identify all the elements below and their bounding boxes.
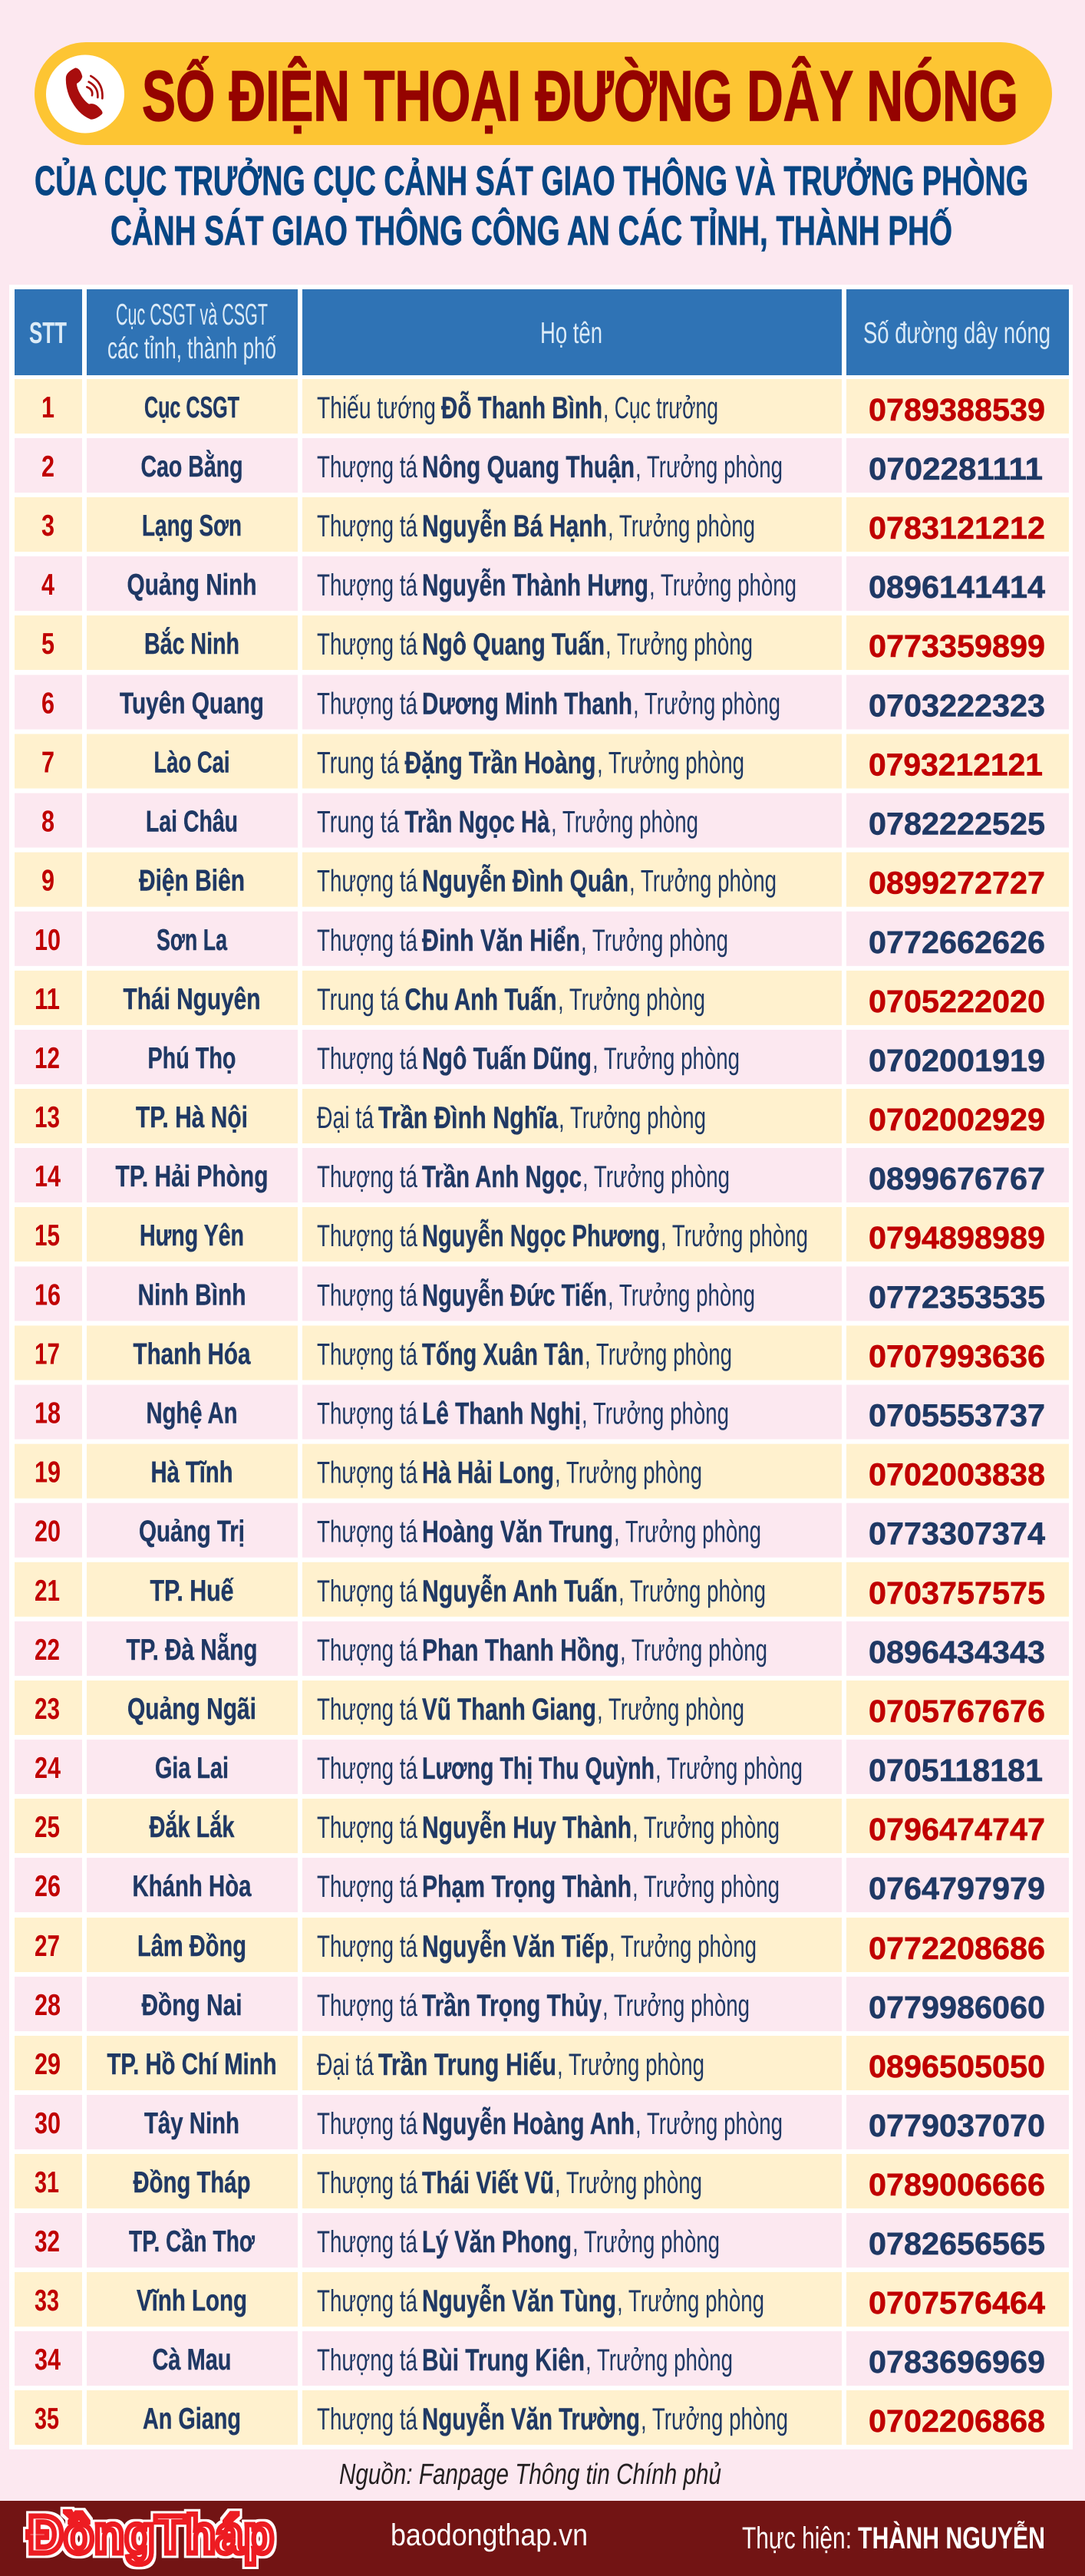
officer: Nguyễn Bá Hạnh	[422, 509, 607, 543]
officer: , Trưởng phòng	[641, 2403, 788, 2436]
footer	[0, 2501, 1085, 2576]
officer: Nguyễn Anh Tuấn	[422, 1574, 618, 1608]
phone: 0789006666	[869, 2167, 1045, 2202]
row 26	[15, 1858, 1069, 1912]
phone: 0702002929	[869, 1102, 1045, 1137]
officer: Thượng tá	[317, 1811, 418, 1845]
unit: Đồng Tháp	[134, 2166, 250, 2199]
row 1	[15, 379, 1069, 434]
number: 32	[35, 2225, 60, 2258]
subtitle	[35, 157, 1028, 254]
officer: , Trưởng phòng	[551, 806, 698, 839]
number: 3	[41, 510, 54, 543]
officer: Thượng tá	[317, 510, 418, 543]
number: 5	[41, 628, 54, 661]
officer: Ngô Quang Tuấn	[422, 628, 605, 661]
phone: 0703757575	[869, 1575, 1045, 1611]
phone: 0896505050	[869, 2049, 1045, 2084]
source note: Nguồn: Fanpage Thông tin Chính phủ	[339, 2459, 721, 2491]
officer: , Trưởng phòng	[597, 746, 744, 780]
unit: Thanh Hóa	[134, 1338, 251, 1370]
phone: 0783696969	[869, 2344, 1045, 2380]
officer: Trần Anh Ngọc	[422, 1160, 582, 1194]
officer: Thượng tá	[317, 450, 418, 484]
officer: , Trưởng phòng	[582, 1397, 729, 1431]
officer: Lý Văn Phong	[422, 2225, 572, 2259]
officer: Thượng tá	[317, 924, 418, 958]
row 7	[15, 734, 1069, 789]
phone: 0703222323	[869, 688, 1045, 723]
officer: Nguyễn Đức Tiến	[422, 1278, 607, 1312]
officer: Nguyễn Văn Trường	[422, 2402, 640, 2436]
unit: TP. Đà Nẵng	[126, 1633, 258, 1667]
unit: TP. Hà Nội	[136, 1101, 248, 1134]
phone: 0789388539	[869, 392, 1045, 427]
number: 7	[41, 746, 54, 780]
number: 25	[35, 1811, 60, 1844]
unit: Nghệ An	[146, 1397, 238, 1430]
row 23	[15, 1681, 1069, 1735]
officer: Nguyễn Văn Tiếp	[422, 1929, 608, 1964]
officer: Thượng tá	[317, 1930, 418, 1964]
number: 9	[41, 865, 54, 898]
row 4	[15, 556, 1069, 611]
officer: Thượng tá	[317, 1989, 418, 2023]
phone: 0899272727	[869, 866, 1045, 901]
number: 27	[35, 1930, 60, 1963]
officer: Thượng tá	[317, 1575, 418, 1608]
officer: , Trưởng phòng	[572, 2225, 720, 2259]
row 18	[15, 1385, 1069, 1440]
officer: , Trưởng phòng	[614, 1516, 761, 1549]
phone: 0794898989	[869, 1220, 1045, 1255]
officer: Trần Trọng Thủy	[422, 1989, 602, 2023]
officer: Đỗ Thanh Bình	[441, 391, 602, 425]
number: 23	[35, 1693, 60, 1726]
number: 2	[41, 450, 54, 483]
officer: , Trưởng phòng	[632, 1811, 780, 1845]
row 27	[15, 1918, 1069, 1972]
row 29	[15, 2036, 1069, 2090]
officer: Lê Thanh Nghị	[422, 1397, 581, 1431]
officer: Trung tá	[317, 746, 400, 780]
officer: Nguyễn Đình Quân	[422, 864, 628, 899]
header: STT: STT	[29, 317, 67, 350]
row 24	[15, 1740, 1069, 1794]
phone: 0705767676	[869, 1694, 1045, 1729]
unit: Đắk Lắk	[149, 1810, 235, 1844]
officer: Thiếu tướng	[317, 391, 436, 425]
phone: 0796474747	[869, 1812, 1045, 1847]
row 10	[15, 912, 1069, 966]
unit: Cà Mau	[152, 2343, 232, 2376]
unit: Ninh Bình	[138, 1278, 246, 1311]
number: 29	[35, 2048, 61, 2081]
officer: Thượng tá	[317, 2343, 418, 2377]
officer: Thượng tá	[317, 569, 418, 602]
officer: Đặng Trần Hoàng	[405, 746, 595, 780]
unit: Cục CSGT	[144, 391, 239, 424]
number: 17	[35, 1338, 60, 1370]
row 16	[15, 1266, 1069, 1321]
officer: Thượng tá	[317, 865, 418, 899]
number: 12	[35, 1042, 60, 1075]
phone: 0896141414	[869, 569, 1045, 605]
officer: Trung tá	[317, 806, 400, 839]
phone: 0896434343	[869, 1634, 1045, 1670]
unit: An Giang	[143, 2403, 241, 2436]
phone: 0773359899	[869, 628, 1045, 664]
unit: Gia Lai	[155, 1752, 229, 1785]
officer: , Trưởng phòng	[555, 2166, 702, 2200]
officer: , Trưởng phòng	[557, 2048, 704, 2082]
phone: 0764797979	[869, 1871, 1045, 1906]
row 13	[15, 1089, 1069, 1143]
officer: , Trưởng phòng	[632, 1870, 780, 1904]
officer: Dương Minh Thanh	[422, 688, 632, 721]
number: 13	[35, 1101, 60, 1134]
phone: 0782222525	[869, 806, 1045, 842]
header: unit	[107, 298, 276, 365]
officer: Trung tá	[317, 983, 400, 1017]
unit: Phú Thọ	[147, 1042, 236, 1075]
officer: Thượng tá	[317, 1752, 418, 1786]
officer: , Trưởng phòng	[629, 865, 777, 899]
officer: , Trưởng phòng	[617, 2284, 764, 2318]
title banner	[35, 42, 1052, 145]
officer: Thượng tá	[317, 1516, 418, 1549]
row 33	[15, 2272, 1069, 2327]
number: 19	[35, 1456, 61, 1489]
officer: Phạm Trọng Thành	[422, 1870, 632, 1904]
officer: Nguyễn Ngọc Phương	[422, 1219, 660, 1253]
phone: 0899676767	[869, 1161, 1045, 1196]
officer: Hoàng Văn Trung	[422, 1516, 613, 1549]
unit: Quảng Ninh	[127, 569, 256, 602]
officer: , Trưởng phòng	[655, 1752, 803, 1786]
officer: , Trưởng phòng	[602, 1989, 750, 2023]
row 25	[15, 1799, 1069, 1853]
officer: Thái Viết Vũ	[422, 2166, 554, 2200]
phone: 0705553737	[869, 1398, 1045, 1433]
website: baodongthap.vn	[391, 2518, 588, 2552]
phone: 0707576464	[869, 2285, 1045, 2320]
officer: Thượng tá	[317, 2107, 418, 2141]
officer: Nông Quang Thuận	[422, 450, 635, 484]
row 5	[15, 615, 1069, 670]
row 21	[15, 1562, 1069, 1617]
officer: , Trưởng phòng	[605, 628, 753, 661]
number: 31	[35, 2166, 59, 2199]
officer: , Trưởng phòng	[633, 688, 780, 721]
icon: phone	[46, 55, 124, 134]
officer: Tống Xuân Tân	[422, 1338, 584, 1372]
number: 8	[41, 806, 54, 839]
row 34	[15, 2331, 1069, 2386]
officer: Thượng tá	[317, 1693, 418, 1727]
row 6	[15, 675, 1069, 729]
unit: Hà Tĩnh	[150, 1456, 233, 1489]
number: 30	[35, 2107, 61, 2140]
unit: TP. Hải Phòng	[115, 1160, 269, 1193]
officer: Thượng tá	[317, 1456, 418, 1490]
officer: Thượng tá	[317, 1397, 418, 1431]
number: 22	[35, 1634, 60, 1667]
officer: , Trưởng phòng	[555, 1456, 702, 1490]
officer: , Trưởng phòng	[585, 2343, 733, 2377]
number: 16	[35, 1278, 61, 1311]
officer: , Trưởng phòng	[608, 510, 755, 543]
unit: Thái Nguyên	[123, 983, 261, 1016]
officer: Trần Trung Hiếu	[378, 2048, 556, 2082]
row 20	[15, 1503, 1069, 1558]
phone: 0772353535	[869, 1279, 1045, 1314]
row 15	[15, 1207, 1069, 1262]
officer: , Trưởng phòng	[618, 1575, 766, 1608]
row 19	[15, 1444, 1069, 1499]
phone: 0705222020	[869, 984, 1045, 1019]
number: 33	[35, 2284, 59, 2317]
unit: Điện Biên	[139, 865, 245, 898]
phone: 0793212121	[869, 747, 1043, 783]
officer: , Trưởng phòng	[620, 1634, 767, 1667]
phone: 0783121212	[869, 510, 1045, 546]
unit: Sơn La	[157, 924, 227, 957]
officer: , Trưởng phòng	[559, 1101, 706, 1135]
phone: 0772662626	[869, 925, 1045, 960]
unit: Vĩnh Long	[137, 2284, 247, 2317]
phone: 0773307374	[869, 1516, 1045, 1552]
officer: Thượng tá	[317, 1042, 418, 1076]
number: 26	[35, 1870, 61, 1903]
unit: Hưng Yên	[140, 1219, 244, 1252]
row 17	[15, 1326, 1069, 1380]
officer: Lương Thị Thu Quỳnh	[422, 1752, 655, 1786]
officer: , Trưởng phòng	[635, 450, 783, 484]
phone: 0702003838	[869, 1457, 1045, 1492]
credit: Thực hiện:	[742, 2522, 852, 2555]
officer: Chu Anh Tuấn	[405, 983, 557, 1017]
officer: Nguyễn Huy Thành	[422, 1810, 632, 1845]
unit: Tuyên Quang	[120, 688, 264, 720]
officer: , Trưởng phòng	[582, 1160, 730, 1194]
row 22	[15, 1621, 1069, 1676]
row 12	[15, 1030, 1069, 1084]
officer: Thượng tá	[317, 628, 418, 661]
number: 28	[35, 1989, 61, 2022]
officer: Phan Thanh Hồng	[422, 1634, 619, 1667]
row 35	[15, 2390, 1069, 2445]
header: unit: Cục CSGT và CSGT	[116, 298, 268, 331]
phone: 0779037070	[869, 2108, 1045, 2143]
header: unit: các tỉnh, thành phố	[107, 332, 276, 365]
unit: Lai Châu	[146, 806, 238, 839]
officer: Bùi Trung Kiên	[422, 2343, 585, 2377]
officer: , Trưởng phòng	[609, 1930, 757, 1964]
officer: Thượng tá	[317, 1160, 418, 1194]
number: 11	[35, 983, 60, 1016]
unit: Lào Cai	[153, 746, 230, 780]
phone: 0702206868	[869, 2403, 1045, 2439]
officer: Nguyễn Thành Hưng	[422, 568, 648, 602]
phone: 0782656565	[869, 2226, 1045, 2261]
number: 24	[35, 1752, 61, 1785]
unit: TP. Huế	[150, 1575, 234, 1608]
row 8	[15, 793, 1069, 848]
officer: Đinh Văn Hiển	[422, 924, 580, 958]
phone: 0772208686	[869, 1931, 1045, 1966]
number: 21	[35, 1575, 60, 1608]
number: 6	[41, 688, 54, 720]
officer: , Trưởng phòng	[592, 1042, 740, 1076]
officer: Đại tá	[317, 1101, 374, 1135]
officer: Thượng tá	[317, 1338, 418, 1372]
row 31	[15, 2154, 1069, 2208]
officer: Thượng tá	[317, 2225, 418, 2259]
officer: Trần Ngọc Hà	[405, 806, 550, 839]
row 32	[15, 2213, 1069, 2268]
header: name: Họ tên	[540, 317, 602, 350]
unit: Cao Bằng	[141, 450, 242, 483]
officer: Thượng tá	[317, 2166, 418, 2200]
row 11	[15, 971, 1069, 1025]
phone: 0779986060	[869, 1990, 1045, 2025]
unit: Quảng Ngãi	[127, 1693, 256, 1726]
officer: Thượng tá	[317, 2284, 418, 2318]
officer: , Trưởng phòng	[649, 569, 796, 602]
number: 20	[35, 1516, 61, 1549]
number: 35	[35, 2403, 59, 2436]
officer: , Trưởng phòng	[558, 983, 705, 1017]
table header	[15, 289, 1069, 375]
officer: Vũ Thanh Giang	[422, 1693, 596, 1727]
unit: Lạng Sơn	[142, 510, 242, 543]
officer: , Trưởng phòng	[597, 1693, 744, 1727]
officer: Thượng tá	[317, 2403, 418, 2436]
number: 1	[41, 391, 54, 424]
officer: Thượng tá	[317, 1870, 418, 1904]
officer: Đại tá	[317, 2048, 374, 2082]
phone: 0705118181	[869, 1753, 1043, 1788]
officer: Thượng tá	[317, 1634, 418, 1667]
number: 34	[35, 2343, 61, 2376]
officer: , Trưởng phòng	[585, 1338, 732, 1372]
logo: ĐồngTháp	[28, 2505, 274, 2564]
phone: 0702001919	[869, 1043, 1045, 1078]
officer: Thượng tá	[317, 1219, 418, 1253]
officer: Thượng tá	[317, 688, 418, 721]
officer: Trần Đình Nghĩa	[378, 1101, 559, 1135]
number: 4	[41, 569, 54, 602]
unit: Quảng Trị	[139, 1516, 245, 1549]
row 3	[15, 497, 1069, 552]
unit: Khánh Hòa	[132, 1870, 252, 1903]
unit: TP. Hồ Chí Minh	[107, 2048, 276, 2081]
row 30	[15, 2095, 1069, 2149]
officer: Nguyễn Hoàng Anh	[422, 2106, 635, 2141]
officer: , Trưởng phòng	[581, 924, 728, 958]
unit: Đồng Nai	[141, 1989, 242, 2022]
number: 10	[35, 924, 61, 957]
row 9	[15, 853, 1069, 907]
officer: Ngô Tuấn Dũng	[422, 1042, 592, 1076]
number: 15	[35, 1219, 60, 1252]
unit: Bắc Ninh	[144, 627, 239, 661]
number: 14	[35, 1160, 61, 1193]
unit: Lâm Đồng	[137, 1930, 246, 1963]
row 14	[15, 1148, 1069, 1202]
row 2	[15, 438, 1069, 493]
phone: 0707993636	[869, 1338, 1045, 1374]
officer: , Trưởng phòng	[635, 2107, 783, 2141]
number: 18	[35, 1397, 61, 1430]
phone: 0702281111	[869, 451, 1043, 487]
row 28	[15, 1977, 1069, 2031]
officer: Hà Hải Long	[422, 1456, 554, 1490]
officer: , Trưởng phòng	[661, 1219, 808, 1253]
unit: Tây Ninh	[144, 2107, 239, 2140]
officer: Nguyễn Văn Tùng	[422, 2284, 616, 2318]
unit: TP. Cần Thơ	[129, 2225, 255, 2258]
officer: Thượng tá	[317, 1278, 418, 1312]
officer: , Cục trưởng	[603, 391, 718, 425]
officer: , Trưởng phòng	[608, 1278, 755, 1312]
